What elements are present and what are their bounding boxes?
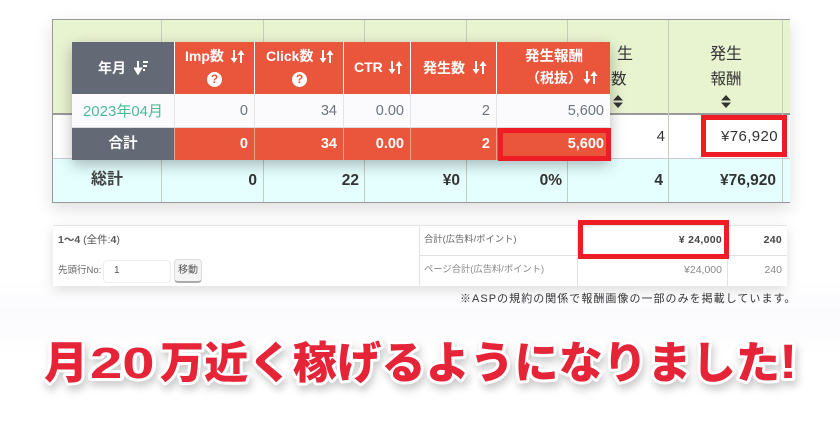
ctr header cell [344,42,410,94]
sum row: 0.00 [376,136,404,152]
data row: 34 [321,103,337,119]
move button [174,259,202,283]
totals row label: 総計 [91,171,123,188]
data row: 0 [240,103,248,119]
sum row: 5,600 [568,136,604,152]
disclaimer note: ※ASPの規約の関係で報酬画像の一部のみを掲載しています。 [460,293,796,305]
pagination count: 1～4 (全件:4) [58,234,120,246]
imp header cell: Imp数 [185,48,224,64]
data row: 0.00 [376,103,404,119]
sum row: 0 [240,136,248,152]
page points: 240 [764,264,782,276]
sum row: 34 [321,136,337,152]
icon: sort arrows imp [230,50,244,63]
value: count row: 4 [657,128,665,145]
totals row values: 4 [654,172,663,189]
icon: sort arrows reward column [721,95,731,108]
totals row values: 0 [248,172,257,189]
value: reward row: ¥76,920 [721,128,778,145]
total points: 240 [764,234,782,246]
ctr header cell: CTR [354,59,383,75]
panel: lower summary table [53,225,787,286]
header: partly hidden count column: 生 [617,46,633,63]
panel: monthly report overlay table [72,42,610,160]
icon: sort arrows reward [584,71,598,84]
row number input: 1 [114,265,120,276]
click header cell: Click数 [266,48,313,64]
data row [72,94,610,128]
click header cell [255,42,343,94]
totals row values [248,172,776,189]
row number input [103,260,171,283]
highlight box: lower total [578,220,729,259]
icon: sort arrows ctr [388,61,402,74]
header: earned reward column: 発生 [710,46,742,63]
icon: sort descending [134,61,148,75]
count header cell [411,42,496,94]
reward header cell: 発生報酬 [525,49,583,65]
first row label: 先頭行No: [58,265,101,276]
imp header cell: ? [211,72,218,86]
sum row: 合計 [108,136,138,152]
highlight box: reward row [701,115,787,157]
count header cell: 発生数 [423,60,465,76]
total amount: ¥ 24,000 [679,234,722,246]
sum row [72,128,610,160]
totals row values: ¥0 [443,172,460,189]
imp header cell [175,42,254,94]
headline [42,334,801,394]
move button: 移動 [178,265,198,276]
month header cell [72,42,174,94]
page amount: ¥24,000 [684,264,722,276]
data row: 2023年04月 [83,103,163,120]
headline: ! [779,334,797,388]
click header cell: ? [296,72,303,86]
totals row values: ¥76,920 [720,172,776,189]
icon: sort arrows count [472,61,486,74]
icon: sort arrows click [320,50,334,63]
reward header cell [497,42,610,94]
totals row values: 0% [540,172,562,189]
headline: 月 [44,339,88,388]
headline: 万近く稼げるようになりました [160,339,780,388]
page total label: ページ合計(広告料/ポイント) [424,264,544,274]
table header row [53,20,790,115]
total label: 合計(広告料/ポイント) [424,234,516,244]
month header cell: 年月 [98,60,126,76]
highlight box: overlay sum [498,128,611,161]
panel: background results table [52,19,790,203]
text: 報酬 [710,71,742,88]
reward header cell: （税抜） [526,70,582,86]
totals row background [53,158,790,202]
headline: 20 [90,338,155,387]
text: 数 [611,71,627,88]
sum row: 2 [482,136,490,152]
data row: 5,600 [568,103,604,119]
totals row values: 22 [342,172,359,189]
icon: sort arrows count column [613,95,623,108]
data row: 2 [482,103,490,119]
